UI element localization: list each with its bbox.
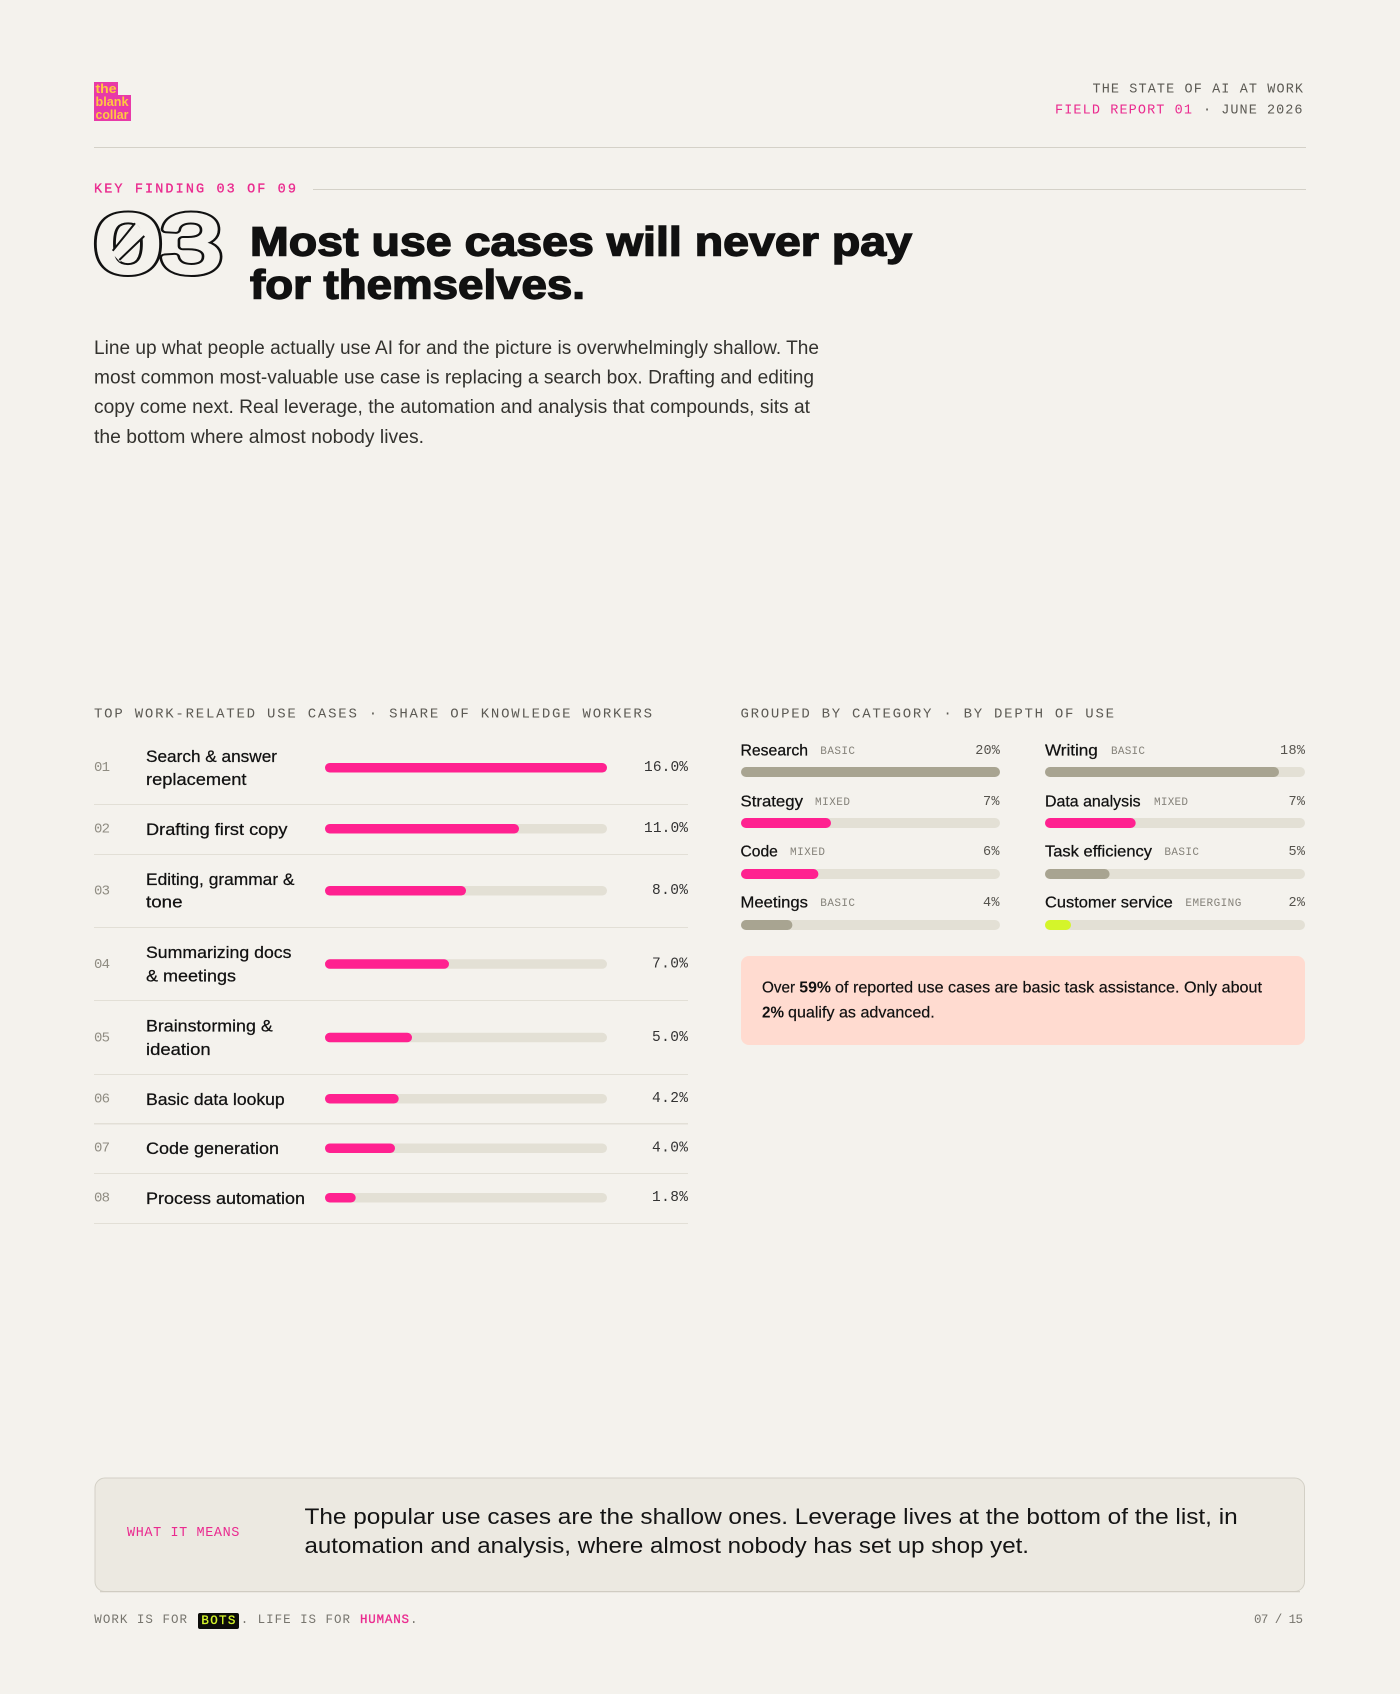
category: meetings: BASIC [820,898,855,910]
row 04: Summarizing docs [146,943,292,962]
row 04: 04 [94,957,110,973]
row 05: 5.0% [652,1030,688,1046]
category: meetings [740,895,1000,930]
callout: basic task assistance: 59% [799,979,831,996]
category: task efficiency: Task efficiency [1045,844,1152,861]
row 02: 02 [94,822,110,838]
callout: basic task assistance: Over [762,979,799,996]
intro paragraph [94,338,819,448]
footer tagline: . [410,1613,418,1627]
intro paragraph: the bottom where almost nobody lives. [94,427,424,448]
category: customer service: EMERGING [1185,898,1241,910]
row 06: Basic data lookup [146,1090,285,1109]
report header meta [1055,82,1304,118]
category: task efficiency [1045,844,1306,879]
row 02: Drafting first copy [146,820,288,839]
category: strategy: Strategy [740,794,803,811]
row 05 [94,1017,688,1074]
category: data analysis: Data analysis [1045,794,1141,811]
category: research: Research [740,743,808,760]
panel: top use cases [94,706,688,1224]
category: data analysis: 7% [1288,795,1306,810]
heading: top use cases: TOP WORK-RELATED USE CASES · SHARE OF KNOWLEDGE WORKERS [94,706,652,722]
logo: the blank collar [94,81,131,122]
category: research: 20% [975,744,1001,759]
outlined number 03: 0 [95,197,161,290]
row 06 [94,1090,688,1124]
row 06: 4.2% [652,1091,688,1107]
row 04: 7.0% [652,957,688,973]
category: code: MIXED [790,847,825,859]
row 01: replacement [146,770,247,789]
panel: grouped by category [740,706,1306,1045]
page number: 07 / 15 [1254,1613,1303,1627]
row 01: 16.0% [644,760,688,776]
category: code: 6% [983,845,1000,860]
row 01: Search & answer [146,747,277,766]
category: strategy: 7% [983,795,1000,810]
intro paragraph: most common most-valuable use case is replacing a search box. Drafting and editing [94,367,814,388]
logo: the blank collar: collar [96,107,128,122]
row 04: & meetings [146,967,236,986]
row 02 [94,820,688,854]
row 03: 8.0% [652,883,688,899]
footer tagline: . LIFE IS FOR [241,1613,350,1627]
outlined number 03: 3 [160,197,222,290]
row 08: Process automation [146,1189,305,1208]
row 06: 06 [94,1092,110,1108]
callout: basic task assistance: 2% [762,1004,784,1021]
category: code [740,844,1000,879]
category: strategy [740,794,1000,828]
row 04 [94,943,688,1000]
row 07: 4.0% [652,1141,688,1157]
row 01 [94,747,688,804]
category: customer service [1045,895,1306,930]
category: customer service: 2% [1288,896,1306,911]
row 03: tone [146,893,182,912]
logo: the blank collar: the [96,81,116,96]
report header meta: FIELD REPORT 01 [1055,104,1192,118]
category: data analysis: MIXED [1154,797,1188,809]
category: writing: BASIC [1111,746,1145,758]
title: Most use cases will never pay [250,218,912,264]
intro paragraph: copy come next. Real leverage, the automation and analysis that compounds, sits at [94,397,811,418]
row 08: 08 [94,1190,110,1206]
category: task efficiency: BASIC [1164,847,1199,859]
row 07: 07 [94,1141,110,1157]
row 01: 01 [94,760,110,776]
row 05: 05 [94,1030,110,1046]
panel: what it means [95,1478,1304,1592]
row 03 [94,870,688,928]
row 08: 1.8% [652,1190,688,1206]
row 07 [94,1139,688,1174]
callout: basic task assistance: of reported use cases are basic task assistance. Only about [835,979,1263,996]
logo: the blank collar: blank [96,94,129,109]
category: meetings: Meetings [740,895,808,912]
outlined number 03: 0 [95,197,161,290]
footer tagline: BOTS [201,1614,235,1628]
title: for themselves. [250,262,585,308]
footer tagline: HUMANS [360,1613,409,1627]
title [250,218,912,308]
row 03: Editing, grammar & [146,870,295,889]
category: research [740,743,1001,777]
panel: what it means: automation and analysis, where almost nobody has set up shop yet. [304,1533,1029,1558]
category: meetings: 4% [983,896,1000,911]
category: task efficiency: 5% [1288,845,1306,860]
panel: what it means: WHAT IT MEANS [127,1526,239,1541]
category: strategy: MIXED [815,797,850,809]
outlined number 03 [95,197,222,290]
category: writing [1045,743,1306,777]
panel: what it means: The popular use cases are the shallow ones. Leverage lives at the bottom of the list, in [304,1504,1238,1529]
report header meta: THE STATE OF AI AT WORK [1092,82,1304,98]
row 08 [94,1189,688,1224]
row 02: 11.0% [644,821,688,837]
category: data analysis [1045,794,1306,828]
outlined number 03: 3 [160,197,222,290]
footer tagline: WORK IS FOR [94,1613,187,1627]
category: customer service: Customer service [1045,895,1173,912]
callout: basic task assistance [741,956,1305,1045]
category: writing: 18% [1280,744,1306,759]
category: code: Code [740,844,778,861]
row 07: Code generation [146,1139,279,1158]
category: writing: Writing [1045,743,1098,760]
row 03: 03 [94,884,110,900]
kicker: key finding: KEY FINDING 03 OF 09 [94,182,296,197]
row 05: ideation [146,1040,211,1059]
report header meta: · JUNE 2026 [1203,104,1302,118]
footer tagline [94,1613,418,1629]
heading: grouped by category: GROUPED BY CATEGORY · BY DEPTH OF USE [740,706,1114,722]
category: research: BASIC [820,746,855,758]
callout: basic task assistance: qualify as advanced. [788,1004,935,1021]
intro paragraph: Line up what people actually use AI for and the picture is overwhelmingly shallow. The [94,338,819,359]
row 05: Brainstorming & [146,1017,273,1036]
